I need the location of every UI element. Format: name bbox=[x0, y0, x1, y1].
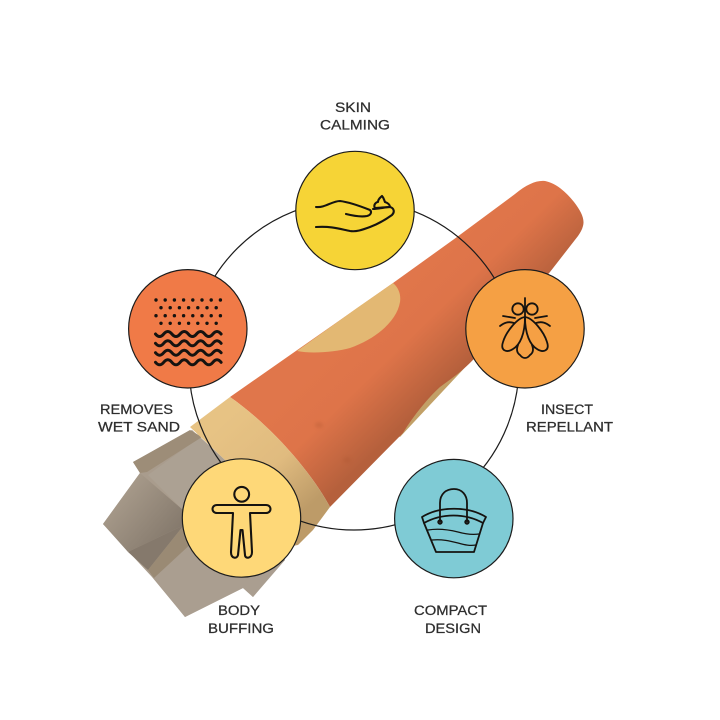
label bbox=[526, 402, 613, 435]
label: SKIN bbox=[335, 100, 371, 115]
label bbox=[320, 100, 390, 132]
label: COMPACT bbox=[414, 603, 487, 618]
disc bbox=[296, 151, 414, 270]
feature: body buffing bbox=[182, 459, 301, 636]
product: exfoliating stick bbox=[103, 181, 584, 617]
connecting ring bbox=[189, 200, 519, 530]
icon: sand dots bbox=[154, 298, 222, 325]
label bbox=[414, 603, 487, 636]
disc bbox=[395, 459, 513, 578]
feature: compact design bbox=[395, 459, 513, 636]
label: DESIGN bbox=[425, 621, 481, 636]
label bbox=[98, 402, 180, 435]
feature: removes wet sand bbox=[98, 270, 247, 435]
beige band near base bbox=[190, 397, 330, 548]
icon: water waves bbox=[156, 332, 221, 365]
beige patch on tube bbox=[297, 283, 400, 352]
label: REMOVES bbox=[100, 402, 173, 417]
label: WET SAND bbox=[98, 420, 180, 435]
icon: hand with cream bbox=[316, 196, 394, 231]
label bbox=[208, 603, 274, 636]
icon: standing person bbox=[212, 487, 270, 558]
disc bbox=[466, 270, 584, 388]
icon: fly bbox=[500, 298, 550, 358]
label: CALMING bbox=[320, 118, 390, 132]
sand groove bbox=[148, 525, 195, 578]
feature: insect repellant bbox=[466, 270, 613, 435]
small bumps on tube bbox=[315, 422, 351, 463]
orange tube body bbox=[230, 181, 584, 507]
label: BODY bbox=[218, 603, 260, 618]
label: REPELLANT bbox=[526, 420, 613, 435]
label: BUFFING bbox=[208, 621, 274, 636]
disc bbox=[182, 459, 301, 577]
disc bbox=[129, 270, 247, 388]
beige sliver under the tube bbox=[380, 350, 472, 437]
icon: beach bag bbox=[422, 489, 486, 552]
label: INSECT bbox=[541, 402, 593, 417]
feature: skin calming bbox=[296, 100, 414, 270]
sand-coloured textured base bbox=[103, 430, 285, 617]
